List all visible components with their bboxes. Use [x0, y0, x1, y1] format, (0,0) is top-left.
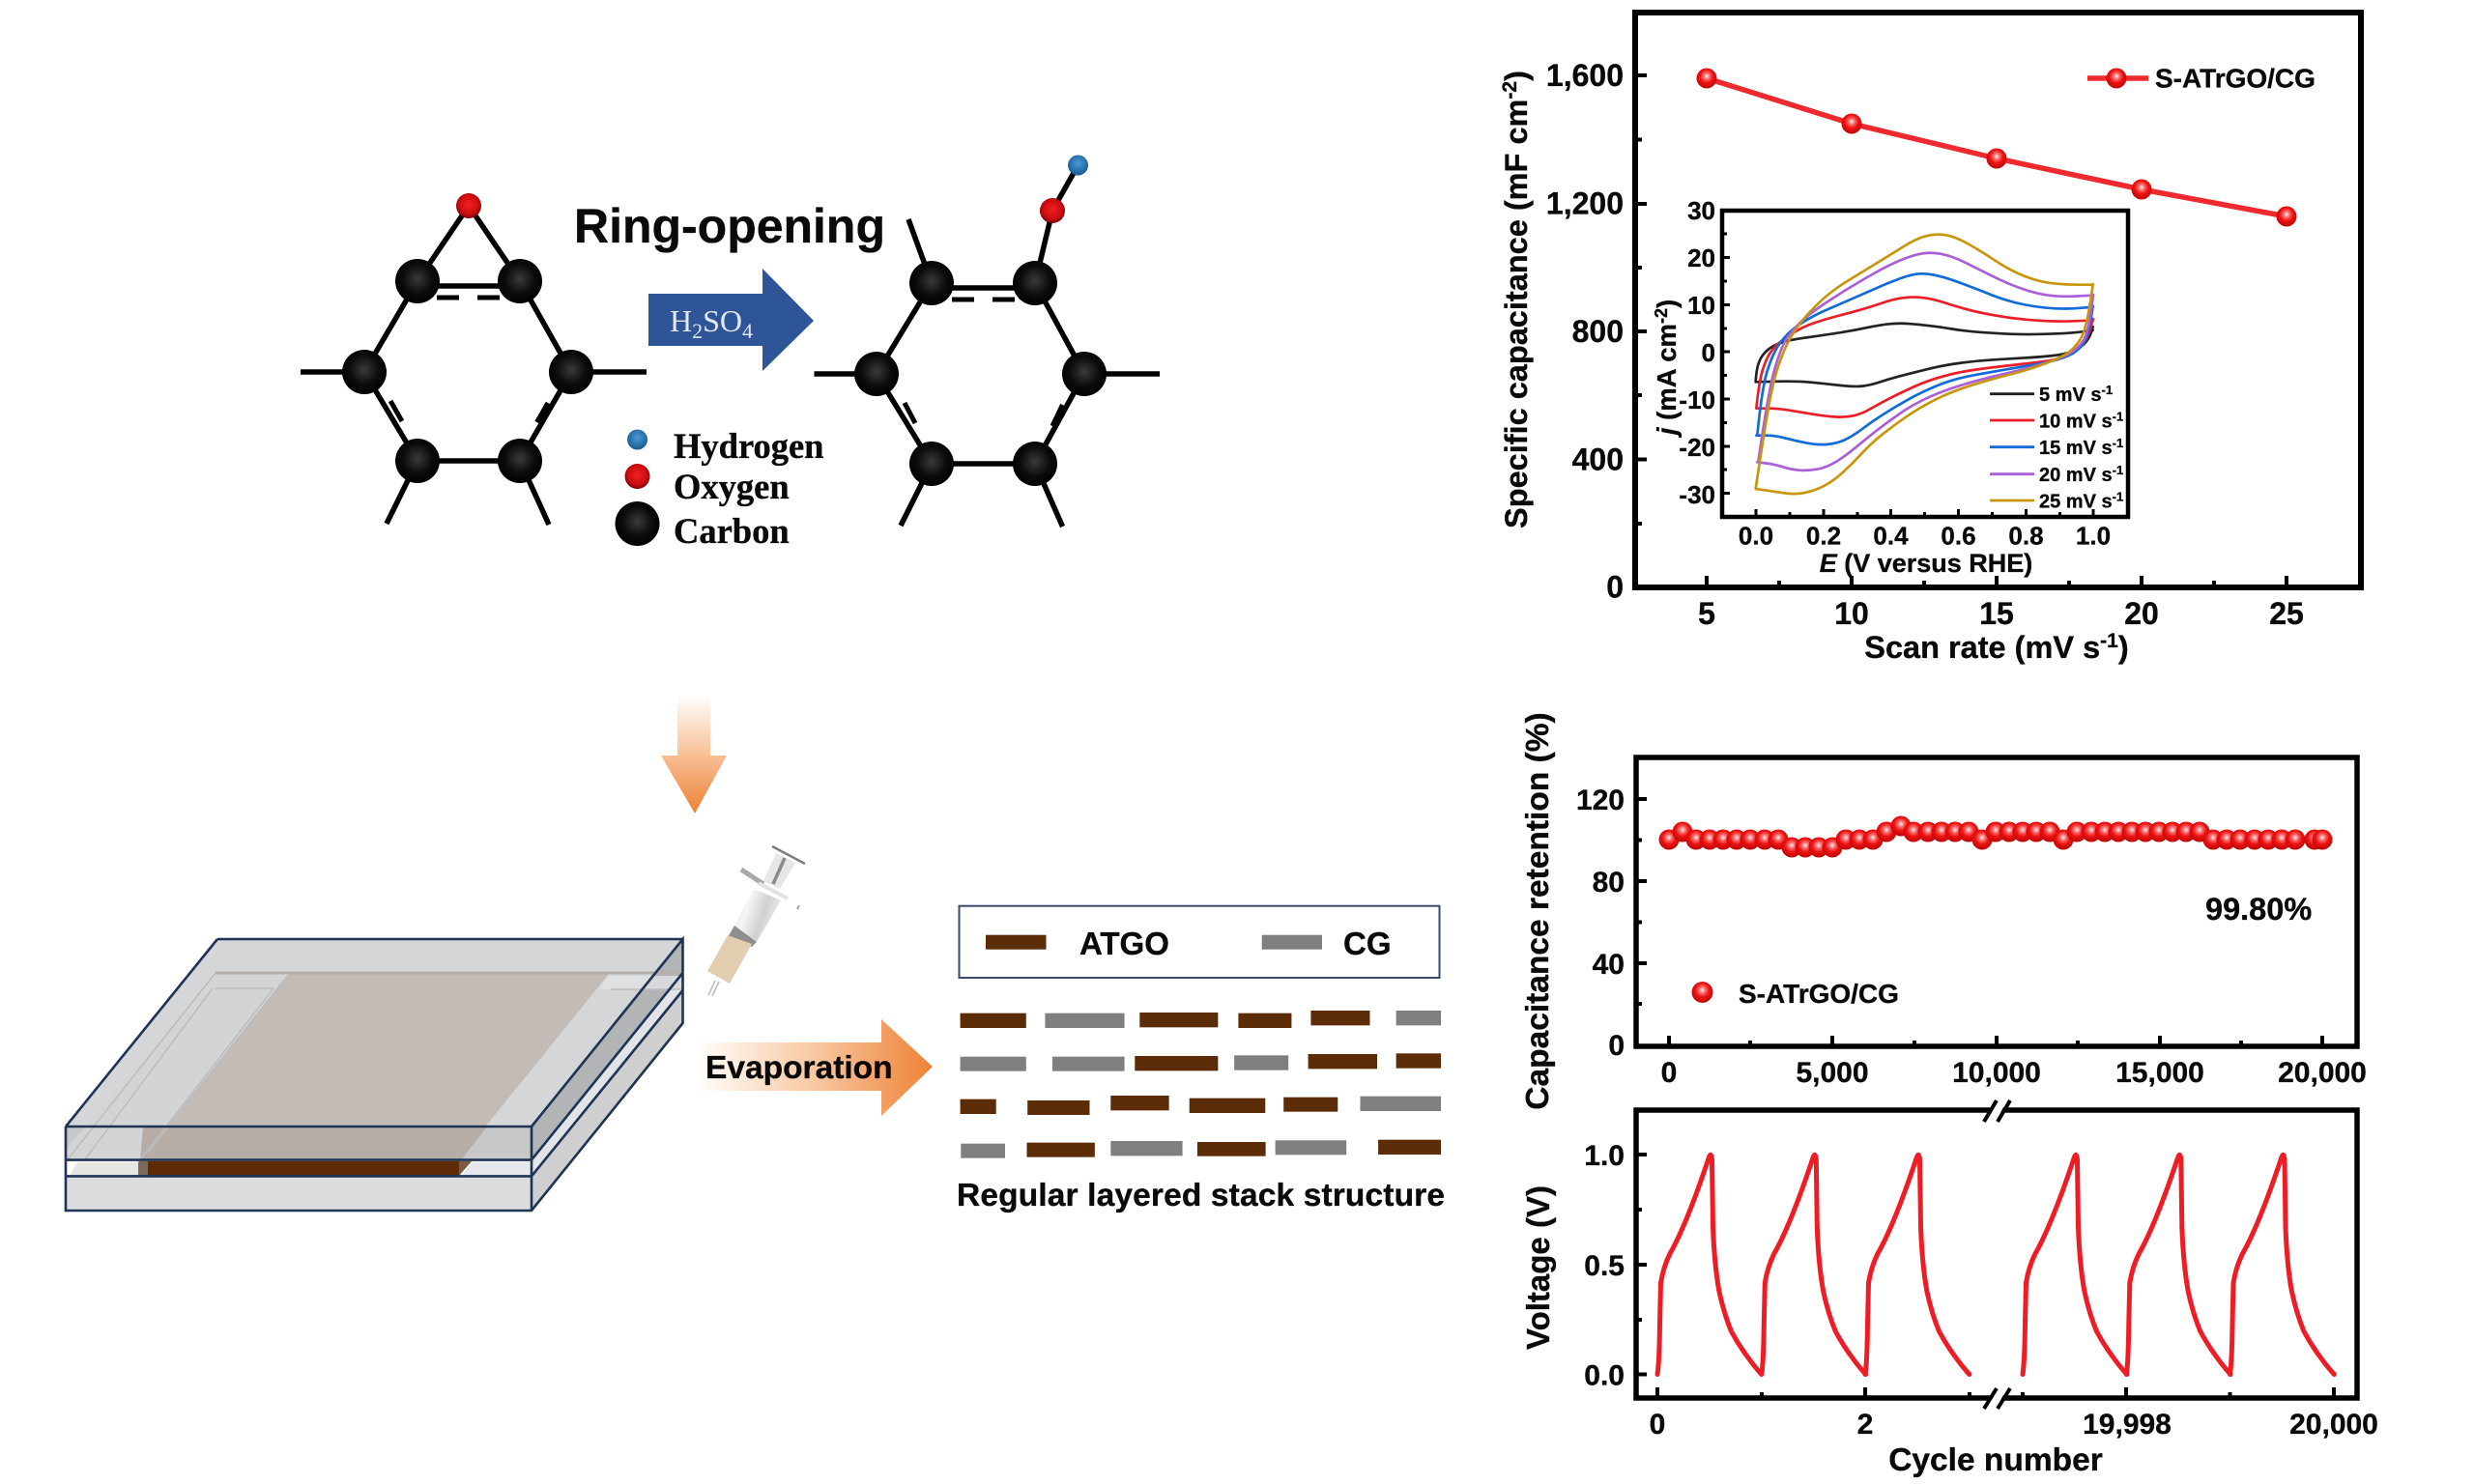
chart: specific capacitance vs scan rate — [1499, 13, 2361, 665]
legend: ATGO and CG — [959, 906, 1440, 978]
legend: S-ATrGO/CG markers: S-ATrGO/CG — [1739, 979, 1899, 1009]
x axis labels: 10 — [1834, 596, 1869, 631]
axis title: scan rate: -1 — [2100, 630, 2118, 652]
axis title: specific capacitance: ) — [1499, 71, 1534, 81]
x axis labels: 20 — [2124, 596, 2159, 631]
legend: atoms: Hydrogen — [674, 426, 823, 466]
retention y labels — [1576, 785, 1625, 1062]
inset x labels: 0.4 — [1873, 522, 1909, 551]
voltage y labels — [1584, 1140, 1625, 1391]
inset y labels: 30 — [1687, 196, 1715, 225]
retention markers — [1658, 815, 2333, 858]
cv curves — [1756, 235, 2093, 494]
arrow: process flow down — [661, 695, 727, 813]
molecule: hydroxyl on carbon ring — [814, 155, 1160, 527]
x axis labels: 25 — [2269, 596, 2304, 631]
retention y labels: 0 — [1608, 1030, 1625, 1062]
x axis labels — [1698, 596, 2304, 631]
inset x labels: 1.0 — [2076, 522, 2111, 551]
arrow: H2SO4 reaction: SO — [703, 303, 742, 338]
panel: ring-opening reaction scheme — [301, 155, 1160, 551]
inset legend: 10 mV s — [2039, 412, 2113, 433]
retention x labels: 5,000 — [1796, 1057, 1869, 1089]
inset y labels: -20 — [1679, 433, 1715, 462]
retention y labels: 120 — [1576, 785, 1625, 816]
y axis labels: 1,200 — [1546, 186, 1624, 220]
inset y labels: 10 — [1687, 291, 1715, 320]
cycle x labels: 0 — [1650, 1409, 1665, 1441]
molecule: epoxide on carbon ring — [301, 193, 647, 525]
cycle x labels: 20,000 — [2289, 1409, 2378, 1441]
axis title: specific capacitance: Specific capacitance (mF cm — [1499, 100, 1534, 528]
retention x labels — [1661, 1057, 2367, 1089]
cycle x labels: 2 — [1857, 1409, 1873, 1441]
illustration: glass mould stack — [66, 939, 682, 1211]
inset legend: -1 — [2113, 463, 2123, 477]
x axis labels: 5 — [1698, 596, 1715, 631]
annotation: retention value: 99.80% — [2205, 892, 2312, 927]
retention x labels: 0 — [1661, 1057, 1677, 1089]
axis title: scan rate: Scan rate (mV s — [1864, 630, 2100, 665]
x axis labels: 15 — [1979, 596, 2014, 631]
inset legend: -1 — [2113, 410, 2123, 423]
inset y labels: 0 — [1702, 338, 1715, 367]
voltage y labels: 0.5 — [1584, 1250, 1625, 1282]
data series line — [1697, 68, 2296, 226]
inset legend: 25 mV s — [2039, 491, 2113, 512]
inset chart: cyclic voltammetry — [1652, 196, 2128, 578]
voltage curves — [1657, 1155, 2334, 1374]
inset legend: 20 mV s — [2039, 465, 2113, 486]
axis title: scan rate: ) — [2118, 630, 2129, 665]
caption: regular layered stack structure: Regular layered stack structure — [957, 1178, 1445, 1213]
inset legend: -1 — [2101, 383, 2113, 397]
y axis labels: 800 — [1572, 314, 1624, 349]
diagram: layered stack bars — [961, 1011, 1441, 1158]
axis breaks — [1984, 1100, 2010, 1409]
legend: ATGO and CG: CG — [1343, 926, 1392, 961]
legend: atoms: Oxygen — [674, 467, 790, 506]
axis title: capacitance retention: Capacitance retention (%) — [1520, 712, 1556, 1110]
voltage y labels: 1.0 — [1584, 1140, 1625, 1172]
y axis labels: 1,600 — [1546, 58, 1624, 93]
inset x labels — [1739, 522, 2111, 551]
inset y title: ) — [1652, 300, 1682, 308]
cycle x labels: 19,998 — [2083, 1409, 2172, 1441]
y axis labels: 400 — [1572, 442, 1624, 477]
retention x labels: 20,000 — [2278, 1057, 2367, 1089]
legend: ATGO and CG: ATGO — [1079, 926, 1169, 961]
inset x title: E (V versus RHE) — [1820, 549, 2032, 578]
cycle x labels — [1650, 1409, 2378, 1441]
axis title: voltage: Voltage (V) — [1520, 1185, 1556, 1350]
retention x labels: 15,000 — [2115, 1057, 2204, 1089]
inset y title: -2 — [1652, 308, 1671, 324]
y axis labels: 0 — [1606, 570, 1624, 605]
y axis labels — [1546, 58, 1624, 605]
arrow: H2SO4 reaction: H — [670, 303, 692, 338]
inset x labels: 0.2 — [1806, 522, 1841, 551]
inset legend: 5 mV s — [2039, 385, 2101, 406]
arrow: H2SO4 reaction: 4 — [742, 319, 753, 343]
inset y labels: -10 — [1679, 385, 1715, 414]
voltage y labels: 0.0 — [1584, 1360, 1625, 1391]
arrow: evaporation: Evaporation — [705, 1050, 893, 1086]
retention y labels: 40 — [1593, 949, 1625, 981]
inset x labels: 0.8 — [2008, 522, 2044, 551]
retention y labels: 80 — [1593, 867, 1625, 899]
icon: syringe — [707, 846, 805, 996]
inset y title: j (mA cm — [1652, 324, 1682, 435]
inset y labels: 20 — [1687, 243, 1715, 272]
axis title: specific capacitance: -2 — [1499, 81, 1521, 100]
inset legend: 15 mV s — [2039, 438, 2113, 459]
legend: S-ATrGO/CG: S-ATrGO/CG — [2155, 64, 2316, 93]
heading: ring-opening: Ring-opening — [574, 199, 885, 253]
arrow: H2SO4 reaction: 2 — [692, 319, 703, 343]
chart: capacitance retention — [1520, 712, 2367, 1110]
inset legend: -1 — [2113, 489, 2123, 504]
axis title: cycle number: Cycle number — [1888, 1442, 2103, 1478]
inset x labels: 0.0 — [1739, 522, 1773, 551]
legend: atoms — [615, 426, 823, 551]
chart: galvanostatic voltage cycles — [1520, 1100, 2378, 1478]
inset y labels — [1679, 196, 1715, 509]
inset y labels: -30 — [1679, 480, 1715, 509]
inset x labels: 0.6 — [1941, 522, 1976, 551]
arrow: H2SO4 reaction — [648, 269, 814, 371]
legend: atoms: Carbon — [674, 511, 790, 551]
arrow: evaporation — [695, 1019, 933, 1116]
retention x labels: 10,000 — [1952, 1057, 2041, 1089]
inset legend: -1 — [2113, 436, 2123, 450]
inset legend — [1990, 383, 2123, 512]
